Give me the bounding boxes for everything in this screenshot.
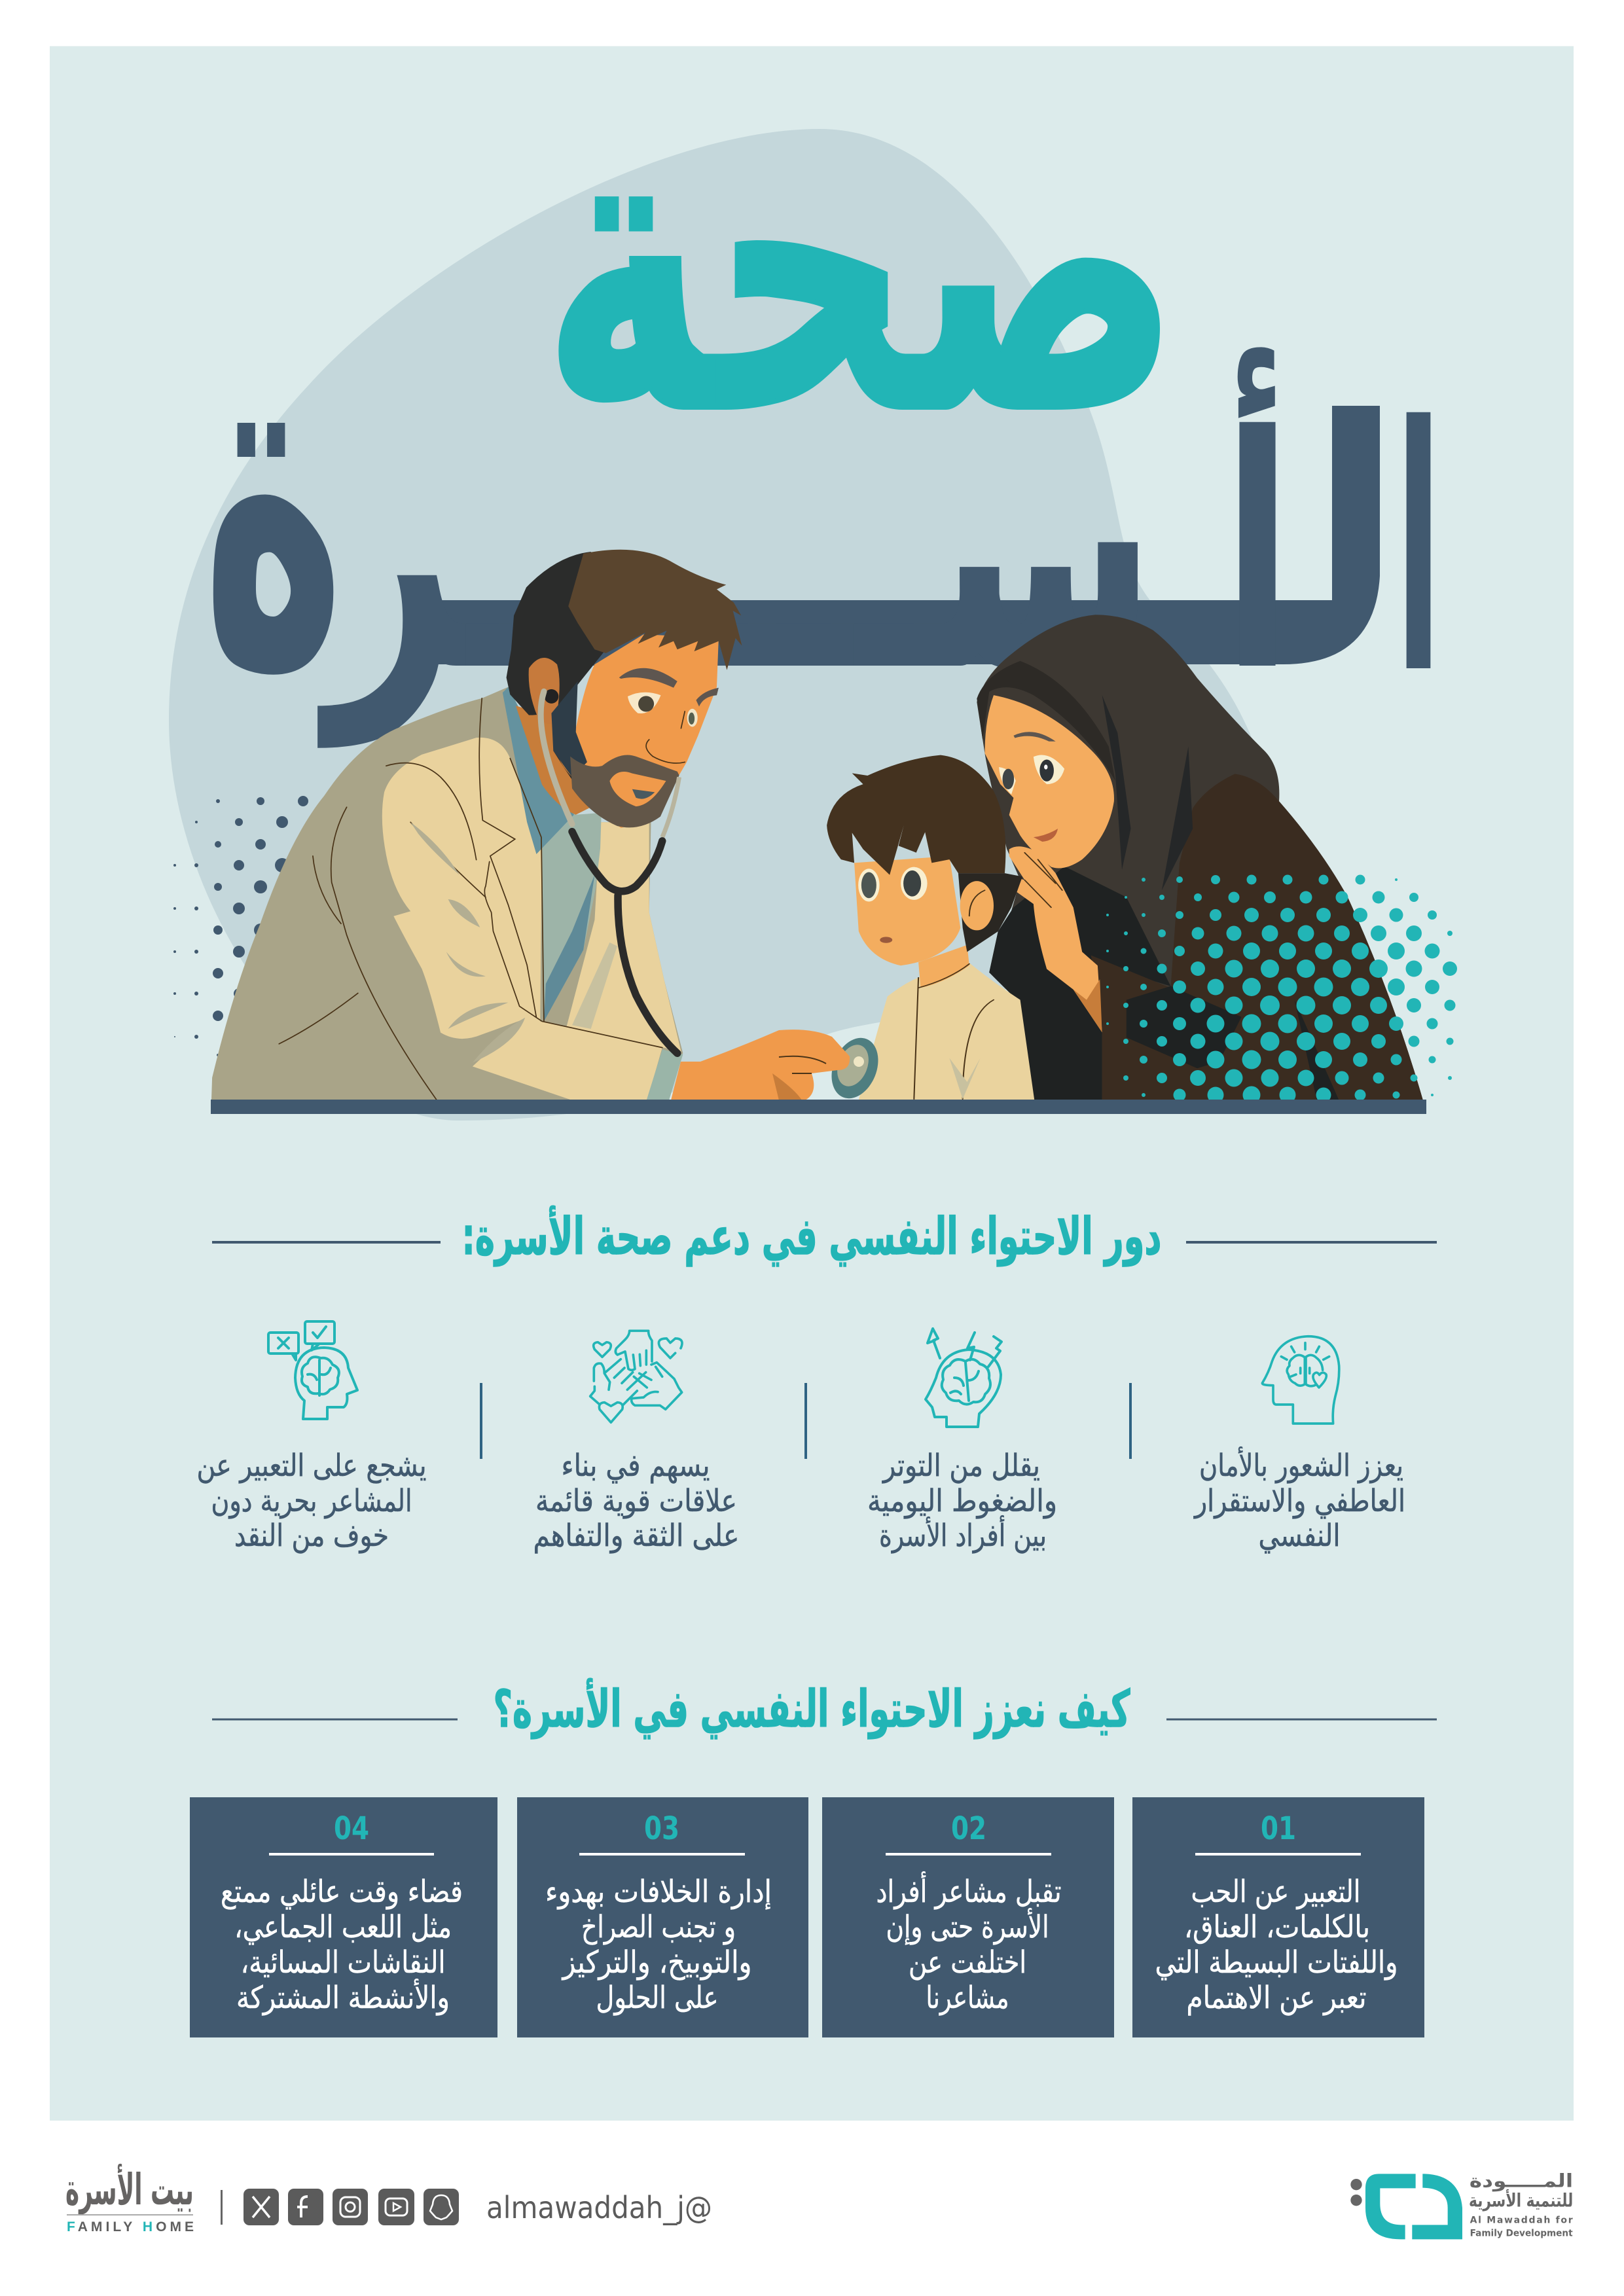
title: the family: ســــــر <box>316 353 1157 750</box>
social icons <box>244 2189 459 2225</box>
card 02: اختلفت عن <box>909 1945 1026 1981</box>
footer divider <box>221 2190 223 2225</box>
column 1: emotional security <box>1193 1336 1405 1554</box>
footer logo: al mawaddah <box>1350 2170 1573 2239</box>
card 03: 03 <box>644 1810 679 1847</box>
text: يشجع على التعبير عن <box>196 1448 427 1484</box>
coat lines <box>279 698 662 1100</box>
hair <box>827 755 1005 875</box>
chest piece <box>823 1031 887 1105</box>
footer logo: family home <box>65 2163 194 2234</box>
card 04: والأنشطة المشتركة <box>236 1978 450 2016</box>
eyes <box>1034 755 1064 784</box>
icon: head with brain and heart <box>1262 1336 1339 1424</box>
logo text <box>1469 2170 1573 2239</box>
mouth area <box>609 772 666 806</box>
icon: head with speech bubbles <box>268 1321 357 1419</box>
blue shirt <box>503 687 602 1021</box>
column 3: builds relationships <box>533 1331 740 1554</box>
hand <box>671 1030 850 1100</box>
card 04 <box>190 1797 497 2037</box>
neck <box>918 945 969 988</box>
card 03: إدارة الخلافات بهدوء <box>545 1874 772 1910</box>
card 04: النقاشات المسائية، <box>241 1945 445 1981</box>
card 01: 01 <box>1261 1810 1296 1847</box>
side shadow <box>551 681 587 777</box>
shirt lines <box>914 964 994 1099</box>
text: يعزز الشعور بالأمان <box>1199 1446 1403 1484</box>
logo text: Family Development <box>1470 2229 1573 2239</box>
card 01: بالكلمات، العناق، <box>1184 1909 1370 1945</box>
card 03 <box>517 1797 808 2037</box>
stethoscope <box>541 691 572 824</box>
icon: x <box>244 2189 279 2225</box>
coat folds <box>410 822 525 1063</box>
card 01: تعبر عن الاهتمام <box>1186 1980 1367 2016</box>
column 1: emotional security: العاطفي والاستقرار <box>1193 1483 1405 1519</box>
halftone dots left <box>173 796 309 1056</box>
column 3: builds relationships: علاقات قوية قائمة <box>535 1483 737 1519</box>
illustration: doctor <box>211 550 742 1100</box>
cuff <box>647 1050 683 1100</box>
hijab and robe silhouette <box>977 615 1423 1100</box>
column 2: reduces stress: بين أفراد الأسرة <box>879 1515 1047 1554</box>
column 2: reduces stress <box>867 1329 1057 1554</box>
column 3: builds relationships: على الثقة والتفاهم <box>533 1518 740 1554</box>
card 04: قضاء وقت عائلي ممتع <box>221 1874 463 1910</box>
logo text: للتنمية الأسرية <box>1469 2189 1573 2211</box>
neck <box>516 706 591 815</box>
base bar <box>211 1100 1426 1114</box>
icon: joined hands with hearts <box>590 1331 682 1422</box>
logo mark <box>1350 2174 1462 2239</box>
heading: role of emotional containment: دور الاحتواء النفسي في دعم صحة الأسرة: <box>462 1206 1161 1266</box>
card 02: 02 <box>951 1810 986 1847</box>
ear <box>529 658 560 725</box>
background blob <box>169 129 1283 1121</box>
card 02: تقبل مشاعر أفراد <box>876 1871 1062 1910</box>
hand <box>1005 846 1102 1032</box>
card 03: والتوبيخ، والتركيز <box>562 1945 751 1981</box>
face <box>854 856 960 965</box>
logo text: Al Mawaddah for <box>1470 2215 1573 2226</box>
ear <box>960 881 994 930</box>
veil folds <box>1102 695 1193 890</box>
title: health: صحة <box>542 31 1181 503</box>
footer logo: family home: بيت الأسرة <box>65 2163 194 2215</box>
undershirt <box>566 822 681 1051</box>
dividers <box>481 1383 1130 1459</box>
shoulder robe <box>1091 774 1423 1100</box>
logo text: المـــــودة <box>1470 2170 1573 2191</box>
beard <box>570 755 679 827</box>
column 4: encourages expression: المشاعر بحرية دون <box>211 1483 412 1519</box>
icon: facebook <box>288 2189 323 2225</box>
fold <box>949 1058 981 1099</box>
card 01: واللفتات البسيطة التي <box>1155 1945 1398 1981</box>
card 01: التعبير عن الحب <box>1191 1874 1360 1910</box>
card 04: 04 <box>334 1810 369 1847</box>
face <box>984 695 1114 869</box>
headband <box>977 661 1115 781</box>
card 02 <box>822 1797 1114 2037</box>
card 02: مشاعرنا <box>926 1980 1009 2016</box>
card 04: مثل اللعب الجماعي، <box>234 1909 452 1945</box>
card 03: و تجنب الصراخ <box>581 1909 736 1945</box>
face <box>572 634 719 828</box>
social handle: almawaddah_j@ <box>486 2190 712 2225</box>
title: the family <box>202 230 1442 771</box>
heading: how to strengthen: كيف نعزز الاحتواء النفسي في الأسرة؟ <box>494 1679 1130 1739</box>
illustration: mother <box>977 615 1423 1100</box>
icon: snapchat <box>424 2189 459 2225</box>
illustration: doctor's hand and chest piece <box>671 1030 887 1105</box>
hair back <box>507 552 606 807</box>
text: يسهم في بناء <box>562 1448 710 1484</box>
eyes <box>858 869 880 901</box>
icon: head with brain and lightning <box>926 1329 1001 1427</box>
halftone dots right <box>1106 874 1457 1103</box>
hair back <box>958 873 1022 952</box>
title: the family: أ <box>1222 345 1293 742</box>
card 03: على الحلول <box>596 1980 719 2016</box>
column 4: encourages expression <box>196 1321 427 1554</box>
column 4: encourages expression: خوف من النقد <box>234 1518 389 1554</box>
coat shadow <box>211 687 683 1100</box>
title: the family: ة <box>202 230 346 771</box>
coat light <box>382 738 662 1100</box>
eyebrows <box>619 668 719 706</box>
illustration: boy <box>827 755 1034 1100</box>
footer logo: family home: FAMILY HOME <box>67 2219 194 2234</box>
text: يقلل من التوتر <box>882 1448 1040 1484</box>
card 02: الأسرة حتى وإن <box>886 1907 1049 1945</box>
icon: youtube <box>378 2189 414 2225</box>
shirt <box>859 963 1034 1100</box>
text: ا <box>1395 356 1442 748</box>
icon: instagram <box>333 2189 368 2225</box>
column 1: emotional security: النفسي <box>1258 1518 1341 1554</box>
card 01 <box>1132 1797 1424 2037</box>
eyes <box>628 692 660 713</box>
column 2: reduces stress: والضغوط اليومية <box>867 1483 1057 1519</box>
dark inner robe <box>989 867 1170 1100</box>
hair top <box>568 550 742 670</box>
